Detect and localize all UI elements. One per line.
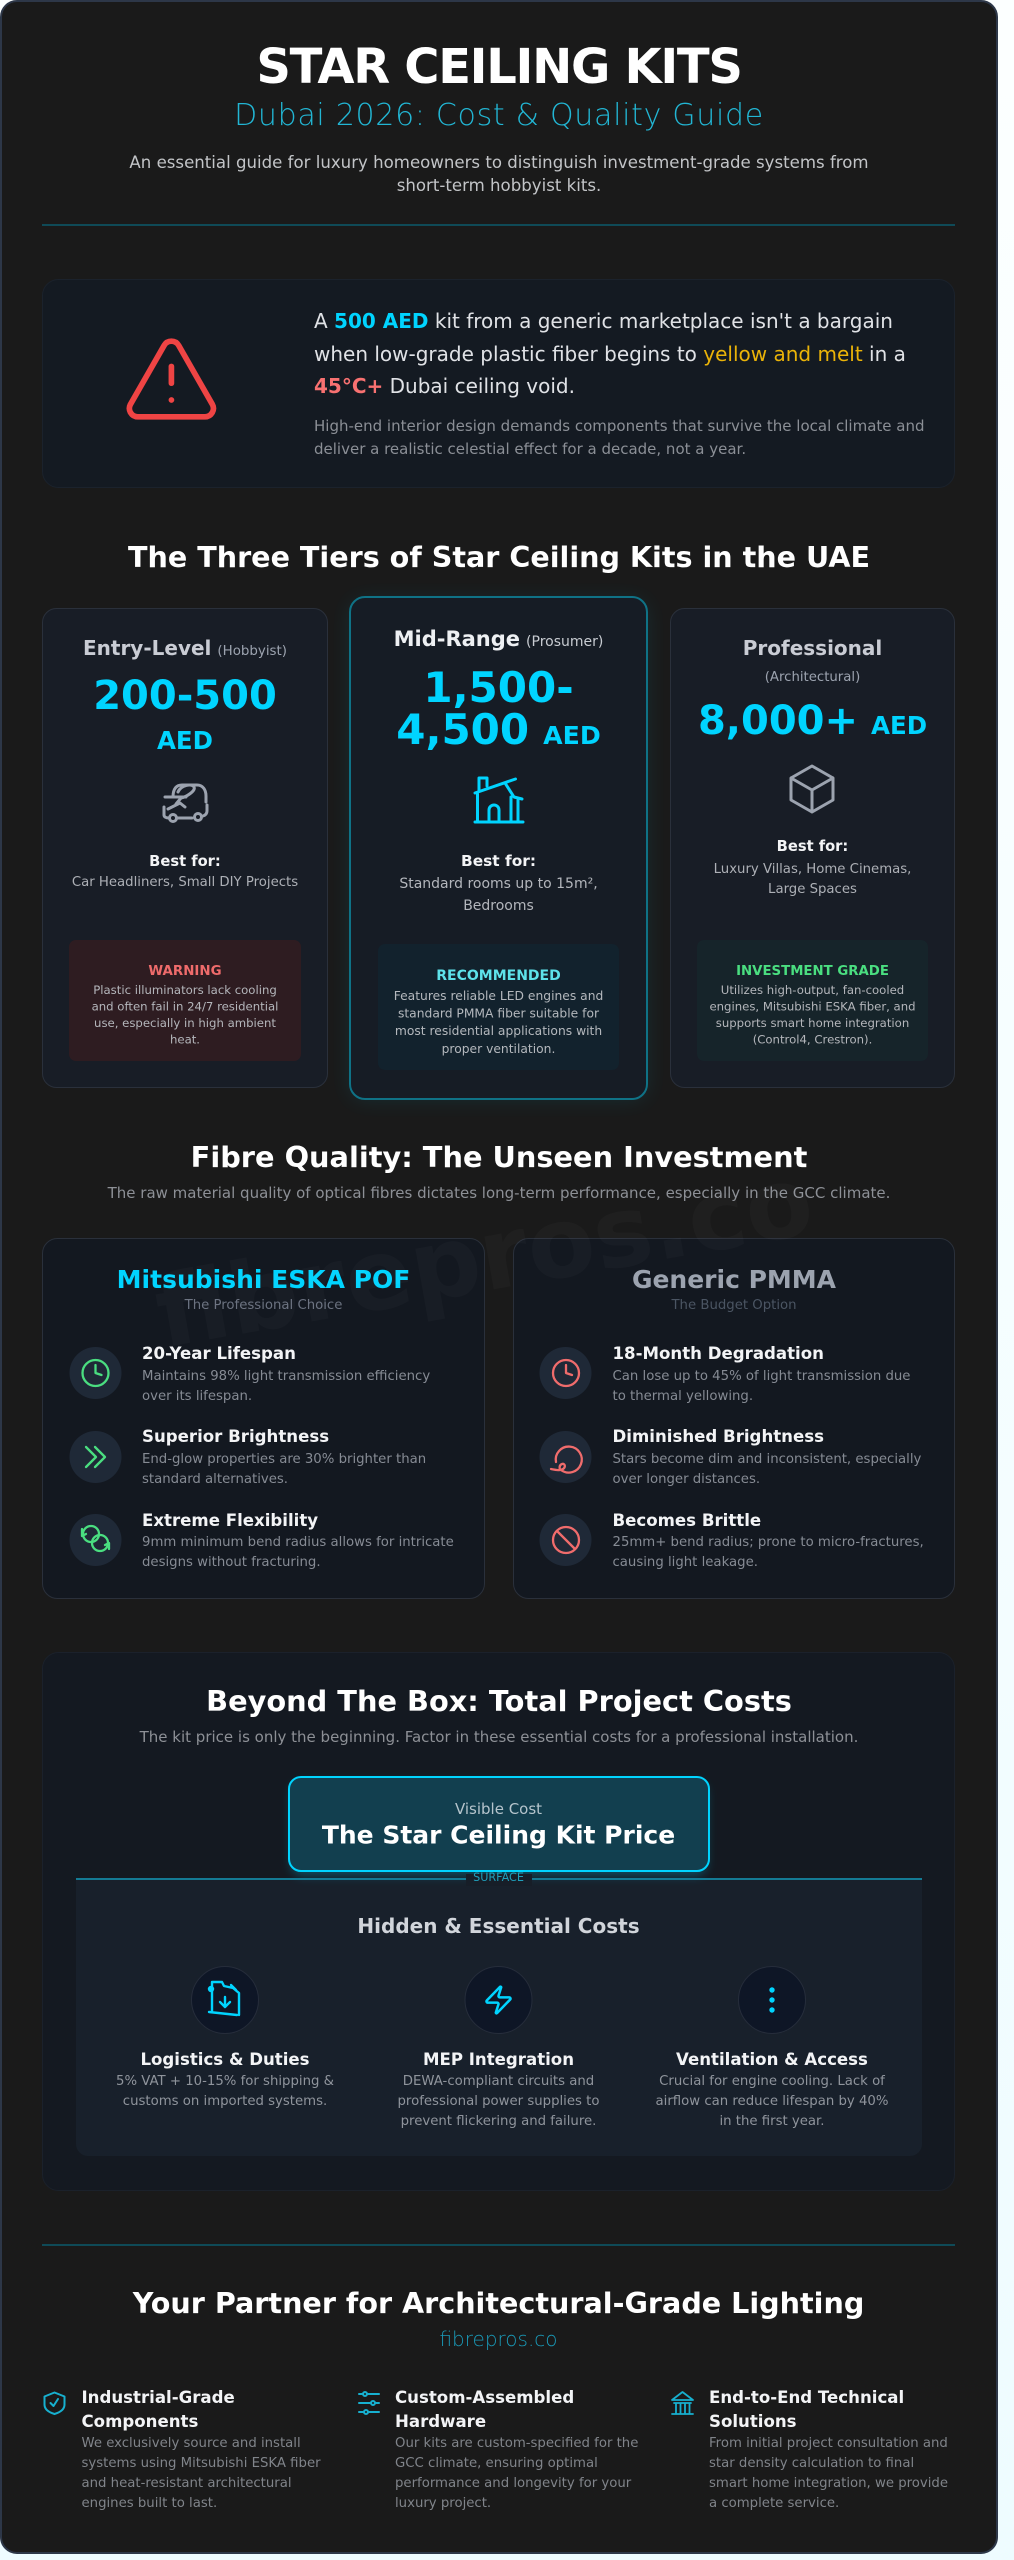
cost: ventilation: airflow can reduce lifespan by 40% (656, 2094, 888, 2109)
callout: recommended (378, 944, 619, 1070)
visible cost box: Visible Cost (455, 1800, 542, 1818)
callout: investment grade (697, 940, 928, 1061)
feature: custom-assembled (359, 2388, 638, 2511)
callout: warning: Plastic illuminators lack cooling (93, 983, 277, 997)
callout: recommended: RECOMMENDED (436, 968, 561, 984)
feature: custom-assembled: Our kits are custom-specified for the (395, 2436, 638, 2451)
callout: investment grade: supports smart home integration (716, 1016, 909, 1030)
hidden costs heading: Hidden & Essential Costs (357, 1914, 640, 1938)
best for (714, 838, 911, 897)
feature: industrial-grade: We exclusively source and install (82, 2436, 301, 2451)
watermark: fibrepros.co (147, 1144, 821, 1371)
cost: MEP: prevent flickering and failure. (401, 2114, 596, 2129)
icon: cube (791, 766, 833, 812)
row: brittle (540, 1511, 924, 1570)
panel heading: The Budget Option (670, 1298, 797, 1313)
row: diminished brightness (540, 1427, 922, 1487)
feature: custom-assembled: luxury project. (395, 2496, 491, 2511)
row: diminished brightness: Diminished Brightness (612, 1427, 824, 1446)
subtitle: Dubai 2026: Cost & Quality Guide (234, 98, 764, 133)
cost: MEP: professional power supplies to (398, 2094, 599, 2109)
heading: fibre quality: Fibre Quality: The Unseen Investment (191, 1140, 808, 1174)
header (129, 39, 869, 195)
row: degradation: to thermal yellowing. (612, 1389, 753, 1404)
callout statement: A 500 AED kit from a generic marketplace isn't a bargain (314, 309, 893, 333)
row: lifespan: 20-Year Lifespan (142, 1344, 296, 1363)
callout: warning: and often fail in 24/7 residential (92, 1000, 278, 1014)
cost: ventilation: Ventilation & Access (676, 2050, 868, 2069)
row: flexibility: designs without fracturing. (142, 1555, 321, 1570)
feature: end-to-end: End-to-End Technical (709, 2388, 904, 2407)
price: AED (157, 726, 213, 755)
feature: industrial-grade: Components (82, 2412, 198, 2431)
callout: warning: use, especially in high ambient (94, 1016, 276, 1030)
row: diminished brightness: Stars become dim and inconsistent, especially (612, 1452, 922, 1467)
row: degradation: Can lose up to 45% of light transmission due (612, 1369, 910, 1384)
feature: industrial-grade: Industrial-Grade (82, 2388, 235, 2407)
feature: end-to-end: smart home integration, we provide (709, 2476, 948, 2491)
callout: investment grade: (Control4, Crestron). (753, 1032, 872, 1046)
cost: logistics (116, 1966, 334, 2109)
best for: Best for: (461, 852, 536, 870)
price (396, 663, 601, 754)
row: brightness: End-glow properties are 30% brighter than (142, 1452, 426, 1467)
intro text: short-term hobbyist kits. (397, 176, 601, 195)
callout supporting text: deliver a realistic celestial effect for a decade, not a year. (314, 440, 746, 458)
callout: warning: WARNING (148, 964, 222, 979)
cost: MEP: DEWA-compliant circuits and (403, 2074, 594, 2089)
icon: sliders (359, 2392, 379, 2414)
row: flexibility (70, 1511, 454, 1570)
row: degradation (540, 1344, 910, 1404)
feature: custom-assembled: performance and longevity for your (395, 2476, 632, 2491)
row: flexibility: Extreme Flexibility (142, 1511, 318, 1530)
callout statement: when low-grade plastic fiber begins to yellow and melt in a (314, 342, 906, 366)
feature: industrial-grade (44, 2388, 321, 2511)
price: 200-500 (93, 673, 277, 719)
panel heading: The Professional Choice (184, 1298, 342, 1313)
heading: three tiers: The Three Tiers of Star Ceiling Kits in the UAE (128, 540, 870, 574)
panel: Mitsubishi ESKA POF (42, 1238, 484, 1598)
tier name: Professional (743, 636, 882, 660)
tier name (743, 636, 882, 685)
panel heading (117, 1265, 410, 1313)
row: lifespan: over its lifespan. (142, 1389, 252, 1404)
row: degradation: 18-Month Degradation (612, 1344, 824, 1363)
panel: Generic PMMA (514, 1238, 954, 1598)
feature: industrial-grade: systems using Mitsubishi ESKA fiber (82, 2456, 321, 2471)
callout: investment grade: engines, Mitsubishi ESKA fiber, and (709, 1000, 916, 1014)
tier name: (Architectural) (765, 670, 860, 685)
section intro: The raw material quality of optical fibres dictates long-term performance, especially in the GCC climate. (107, 1184, 890, 1202)
callout: investment grade: Utilizes high-output, fan-cooled (721, 983, 904, 997)
row: brightness (70, 1427, 426, 1487)
panel heading: Mitsubishi ESKA POF (117, 1265, 410, 1294)
icon: landmark (672, 2392, 693, 2414)
feature: end-to-end: From initial project consultation and (709, 2436, 948, 2451)
icon: warning triangle (129, 341, 213, 417)
feature: industrial-grade: and heat-resistant architectural (82, 2476, 292, 2491)
section heading (139, 1684, 858, 1746)
row: lifespan: Maintains 98% light transmission efficiency (142, 1369, 430, 1384)
heading: partner: Your Partner for Architectural-Grade Lighting (132, 2286, 864, 2320)
feature: custom-assembled: Hardware (395, 2412, 486, 2431)
price: 1,500- (423, 663, 574, 712)
heading: partner (132, 2286, 864, 2351)
cost: logistics: 5% VAT + 10-15% for shipping & (116, 2074, 334, 2089)
surface line (76, 1871, 922, 1886)
cost: ventilation: Crucial for engine cooling. Lack of (659, 2074, 885, 2089)
icon: car (164, 785, 207, 822)
visible cost box: The Star Ceiling Kit Price (322, 1820, 675, 1850)
best for: Best for: (149, 853, 221, 870)
feature: industrial-grade: engines built to last. (82, 2496, 217, 2511)
section heading: The kit price is only the beginning. Factor in these essential costs for a professional installation. (139, 1728, 858, 1746)
price: 8,000+ AED (698, 698, 927, 744)
heading: fibre quality (107, 1140, 890, 1202)
callout: investment grade: INVESTMENT GRADE (736, 964, 889, 979)
feature: custom-assembled: Custom-Assembled (395, 2388, 574, 2407)
row: diminished brightness: over longer distances. (612, 1472, 760, 1487)
row: brittle: Becomes Brittle (612, 1511, 761, 1530)
callout supporting text (314, 417, 925, 458)
row: brittle: 25mm+ bend radius; prone to micro-fractures, (612, 1535, 924, 1550)
best for: Car Headliners, Small DIY Projects (72, 875, 298, 890)
surface line: SURFACE (473, 1871, 524, 1884)
visible cost box (289, 1777, 709, 1876)
cost: logistics: Logistics & Duties (140, 2050, 310, 2069)
callout: warning: heat. (170, 1032, 200, 1046)
best for (399, 852, 598, 914)
price (93, 673, 277, 755)
panel heading: Generic PMMA (632, 1265, 837, 1294)
row: flexibility: 9mm minimum bend radius allows for intricate (142, 1535, 454, 1550)
website: fibrepros.co (439, 2327, 558, 2351)
row: lifespan (70, 1344, 430, 1404)
callout: warning (69, 940, 301, 1061)
cost: logistics: customs on imported systems. (123, 2094, 327, 2109)
feature: end-to-end: Solutions (709, 2412, 797, 2431)
intro text: An essential guide for luxury homeowners to distinguish investment-grade systems from (129, 153, 869, 172)
tier name: Entry-Level (Hobbyist) (83, 636, 287, 660)
feature: custom-assembled: GCC climate, ensuring optimal (395, 2456, 598, 2471)
best for: Standard rooms up to 15m², (399, 876, 598, 892)
row: brightness: standard alternatives. (142, 1472, 288, 1487)
feature: end-to-end (672, 2388, 948, 2511)
callout supporting text: High-end interior design demands components that survive the local climate and (314, 417, 925, 435)
panel: entry-level tier (42, 608, 328, 1088)
panel: professional tier (670, 608, 954, 1088)
cost: MEP (398, 1966, 599, 2129)
best for: Best for: (777, 838, 848, 855)
best for: Luxury Villas, Home Cinemas, (714, 862, 911, 877)
icon: shield (44, 2392, 64, 2414)
hidden costs area (76, 1880, 922, 2156)
best for: Large Spaces (768, 882, 857, 897)
row: brittle: causing light leakage. (612, 1555, 758, 1570)
section heading: Beyond The Box: Total Project Costs (206, 1684, 792, 1718)
panel: mid-range tier (350, 597, 647, 1100)
cost: ventilation (656, 1966, 888, 2129)
panel: total project costs (42, 1652, 954, 2190)
callout: recommended: Features reliable LED engines and (394, 989, 603, 1003)
callout statement (314, 309, 906, 398)
best for: Bedrooms (463, 898, 534, 914)
intro text (129, 153, 869, 195)
panel: warning callout (42, 280, 954, 488)
callout: recommended: most residential applications with (395, 1024, 602, 1038)
callout: recommended: proper ventilation. (442, 1042, 555, 1056)
icon: house (475, 778, 523, 822)
callout statement: 45°C+ Dubai ceiling void. (314, 374, 575, 398)
cost: MEP: MEP Integration (423, 2050, 574, 2069)
best for (72, 853, 298, 890)
tier name: Mid-Range (Prosumer) (394, 627, 603, 651)
panel heading (632, 1265, 837, 1313)
row: brightness: Superior Brightness (142, 1427, 329, 1446)
feature: end-to-end: star density calculation to final (709, 2456, 914, 2471)
cost: ventilation: in the first year. (719, 2114, 825, 2129)
callout: recommended: standard PMMA fiber suitable for (398, 1006, 600, 1020)
feature: end-to-end: a complete service. (709, 2496, 839, 2511)
price: 4,500 AED (396, 705, 601, 754)
title: STAR CEILING KITS (256, 39, 742, 95)
